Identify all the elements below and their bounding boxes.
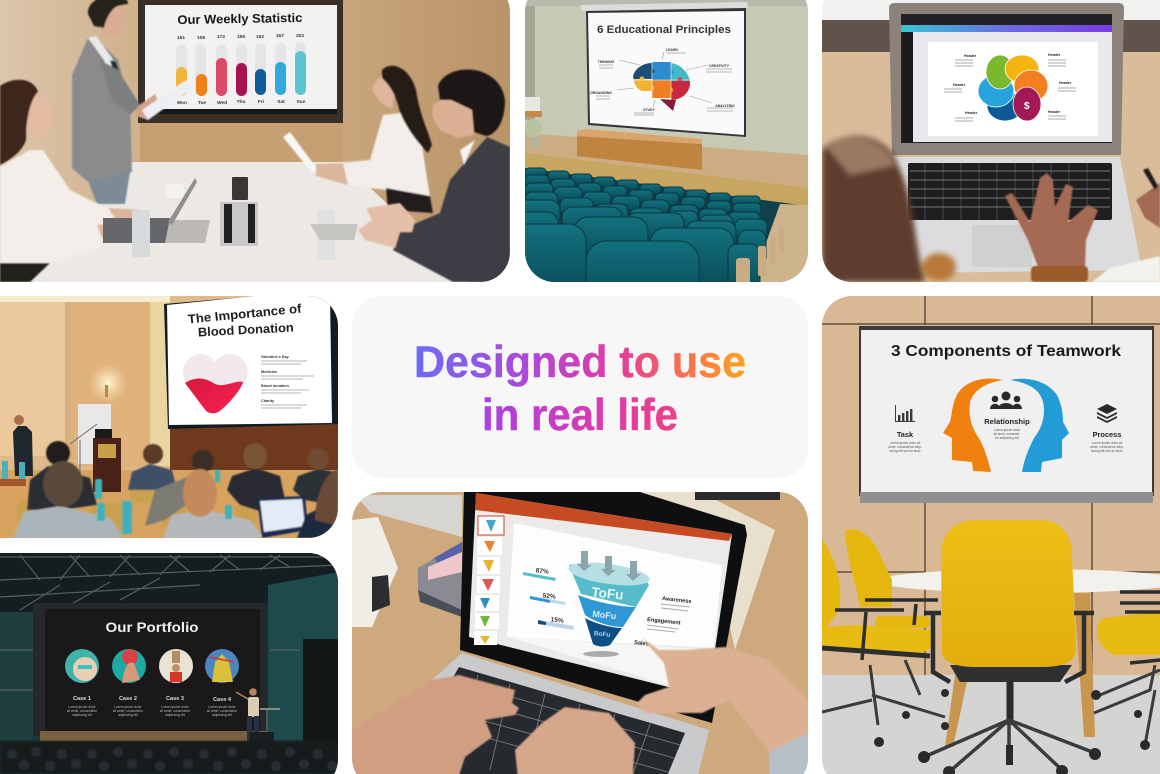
screen: 6 educational principles: 6 Educational Principles (597, 24, 731, 36)
relationship block: Lorem ipsum dolor (994, 428, 1021, 432)
audience (13, 441, 338, 538)
relationship block (984, 392, 1030, 440)
flower infographic (978, 55, 1048, 121)
headline: Designed to use (414, 338, 746, 387)
screen: weekly statistic: Fri (258, 99, 264, 105)
teal auditorium seats (525, 168, 768, 282)
right stage structure (303, 639, 338, 746)
screen: our portfolio: Lorem ipsum dolor (208, 705, 237, 709)
screen: weekly statistic: Wed (217, 100, 227, 106)
right yellow chair (1091, 592, 1160, 750)
progress bars (523, 567, 574, 630)
panel: stage our portfolio (0, 553, 338, 774)
woman at right (283, 66, 433, 213)
laptop: Header (1059, 81, 1072, 85)
main yellow chair (918, 520, 1101, 774)
screen: our portfolio: sit amet, consectetur (67, 709, 98, 713)
task block: iscing elit sed do eiusr (889, 449, 922, 453)
screen: weekly statistic: 151 (177, 35, 185, 41)
laptop (400, 492, 747, 774)
screen: weekly statistic: 155 (237, 34, 245, 40)
viewer hand (1005, 173, 1098, 282)
laptop: Header (1048, 110, 1061, 114)
funnel infographic: BoFu (594, 630, 611, 639)
screen: our portfolio: sit amet, consectetur (207, 709, 238, 713)
screen: blood donation: Valentine's Day (261, 355, 290, 359)
screen: weekly statistic: Our Weekly Statistic (177, 11, 303, 27)
panel: laptop funnel slide (352, 492, 808, 774)
screen: weekly statistic: 157 (276, 33, 284, 39)
presenter (72, 0, 193, 204)
screen: weekly statistic: Sat (277, 99, 285, 105)
screen: our portfolio: sit amet, consectetur (160, 709, 191, 713)
left yellow chairs (822, 529, 949, 747)
screen: our portfolio: adipiscing elit (212, 713, 232, 717)
headline (414, 338, 746, 440)
white table (877, 569, 1160, 747)
screen: weekly statistic: Sun (296, 99, 306, 105)
orange head (943, 379, 1003, 472)
funnel infographic: MoFu (592, 609, 617, 621)
laptop: Header (964, 54, 977, 58)
man at right (358, 69, 510, 282)
blue head (1010, 379, 1069, 472)
case photos (65, 649, 239, 683)
progress bars: 52% (542, 592, 556, 601)
task block (888, 405, 922, 453)
relationship block: tur adipiscing elit (995, 436, 1019, 440)
screen: our portfolio: Lorem ipsum dolor (114, 705, 143, 709)
screen: our portfolio: Lorem ipsum dolor (68, 705, 97, 709)
slide thumbnails (474, 516, 504, 645)
screen: weekly statistic (138, 0, 343, 123)
screen: our portfolio: Case 3 (166, 696, 184, 702)
funnel labels: Engagement (647, 617, 681, 627)
screen: our portfolio: sit amet, consectetur (113, 709, 144, 713)
progress bars: 87% (535, 567, 549, 576)
screen: weekly statistic: Tue (198, 100, 206, 106)
screen: 6 educational principles: THINKING (598, 60, 615, 64)
process block: amet, consectetur adip- (1090, 445, 1124, 449)
task block: amet, consectetur adip- (888, 445, 922, 449)
process block (1090, 404, 1124, 453)
brain puzzle (633, 62, 690, 111)
panel: conference blood donation (0, 296, 338, 538)
screen: blood donation (164, 296, 338, 429)
funnel labels (634, 596, 692, 648)
process block: Lorem ipsum dolor sit (1092, 441, 1122, 445)
funnel infographic (567, 551, 651, 657)
process block: Process (1093, 430, 1121, 439)
laptop on table (103, 178, 210, 257)
woman at left (0, 80, 142, 282)
plant (524, 97, 542, 148)
task block: Task (897, 430, 914, 439)
screen: 3 components of teamwork: 3 Components of Teamwork (891, 343, 1121, 360)
screen: our portfolio: adipiscing elit (165, 713, 185, 717)
screen: weekly statistic: 202 (296, 33, 304, 39)
panel: boardroom weekly statistic (0, 0, 510, 282)
task block: Lorem ipsum dolor sit (890, 441, 920, 445)
flower infographic: $ (1024, 101, 1030, 112)
screen: our portfolio: Lorem ipsum dolor (161, 705, 190, 709)
heart icon (183, 354, 248, 413)
screen: our portfolio: Case 4 (213, 697, 232, 703)
presenter on stage (236, 688, 280, 743)
laptop: Header (953, 83, 966, 87)
funnel labels: Sales (634, 640, 649, 648)
screen: 6 educational principles: STUDY (643, 108, 655, 112)
screen: 6 educational principles: LEARN (666, 48, 678, 52)
panel: lecture hall educational principles (525, 0, 808, 282)
second hand and shirt (1092, 168, 1160, 282)
screen: 6 educational principles: ANALYZING (715, 104, 735, 108)
screen: our portfolio: adipiscing elit (72, 713, 92, 717)
podium (577, 129, 702, 170)
seat armrests and stairs (736, 226, 784, 284)
relationship block: Relationship (984, 417, 1030, 426)
wall lamp (91, 366, 125, 400)
screen: our portfolio: adipiscing elit (118, 713, 138, 717)
pen holder and cable port (220, 177, 358, 260)
screen: blood donation: The Importance of (187, 302, 303, 326)
panel: office teamwork (822, 296, 1160, 774)
papers and book on desk (352, 517, 462, 627)
funnel labels: Awareness (662, 596, 692, 605)
screen: 3 components of teamwork (859, 326, 1154, 503)
screen: our portfolio (33, 603, 268, 741)
panel: headline card (352, 296, 808, 478)
viewer head (822, 136, 956, 282)
laptop (889, 3, 1142, 273)
panel: laptop with flower infographic (822, 0, 1160, 282)
screen: our portfolio: Case 1 (73, 696, 91, 702)
speaker and lectern (0, 404, 121, 492)
screen: blood donation: Charity (261, 399, 275, 403)
screen: weekly statistic: Thu (237, 99, 245, 105)
funnel infographic: ToFu (591, 584, 624, 603)
progress bars: 15% (550, 616, 564, 625)
screen: blood donation: Blood donation (261, 384, 290, 388)
audience silhouettes (0, 741, 338, 774)
screen: 6 educational principles (580, 2, 748, 137)
pointing hand (637, 638, 808, 774)
screen: blood donation: Blood Donation (197, 321, 294, 340)
relationship block: sit amet, consecte- (994, 432, 1020, 436)
laptop: Header (1048, 53, 1061, 57)
screen: weekly statistic: 152 (256, 34, 264, 40)
screen: our portfolio: Our Portfolio (106, 620, 198, 635)
laptop: Header (965, 111, 978, 115)
screen: blood donation: Medicine (261, 370, 277, 374)
process block: iscing elit sed do eiusr (1091, 449, 1124, 453)
screen: our portfolio: Case 2 (119, 696, 137, 702)
screen: 6 educational principles: CREATIVITY (709, 64, 730, 68)
headline: in real life (482, 391, 678, 440)
screen: weekly statistic: 172 (217, 34, 225, 40)
typing hands (352, 675, 635, 774)
screen: weekly statistic: 108 (197, 35, 205, 41)
screen: 6 educational principles: ORGANIZING (590, 91, 612, 95)
screen: weekly statistic: Mon (177, 100, 187, 106)
